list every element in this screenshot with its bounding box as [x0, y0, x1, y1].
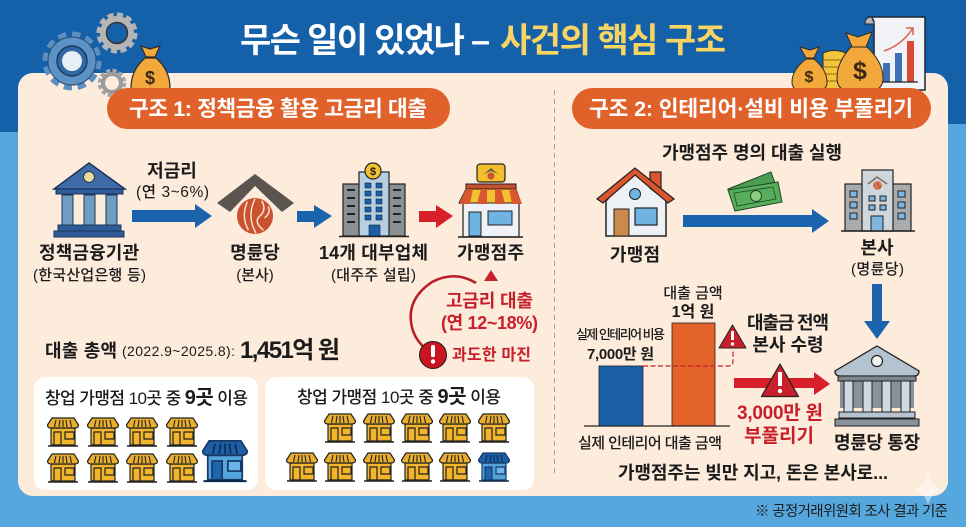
icon: large warning triangle [762, 364, 798, 396]
main panel [18, 73, 948, 496]
icon: HQ building [841, 170, 915, 231]
icon: cash [728, 172, 782, 211]
icon: small warning triangle [719, 325, 746, 348]
label: HQ bank account: 명륜당 통장 [834, 433, 920, 453]
high interest loan loop arrow [411, 270, 498, 348]
label: low interest [136, 161, 209, 201]
title: 사건의 핵심 구조 [500, 22, 726, 60]
label: policy finance institution [33, 243, 146, 284]
bar chart: interior cost vs loan amount: 1억 원 [672, 303, 714, 321]
icon: policy bank [54, 163, 125, 237]
label: high interest loan: 고금리 대출 [446, 291, 533, 311]
label: 30 million won inflated: 3,000만 원 [737, 402, 823, 424]
panel heading: structure 2: 구조 2: 인테리어·설비 비용 부풀리기 [589, 97, 913, 121]
icon: lender building [339, 163, 409, 236]
label: policy finance institution: (한국산업은행 등) [33, 267, 146, 284]
title: 무슨 일이 있었나 – [240, 22, 490, 60]
label: HQ Myungryundang [851, 238, 904, 278]
icon: money bags, coins and growth report: $ [805, 69, 814, 86]
conclusion text: 가맹점주는 빚만 지고, 돈은 본사로... [618, 463, 888, 483]
arrow: bank to HQ [132, 204, 212, 228]
label: 14 lenders: (대주주 설립) [331, 267, 416, 284]
label: loan under franchisee name: 가맹점주 명의 대출 실행 [662, 143, 842, 163]
label: full loan received by HQ: 본사 수령 [752, 335, 824, 355]
panel: franchise usage left [34, 377, 258, 490]
label: 14 lenders: 14개 대부업체 [319, 243, 428, 263]
icon: account bank [835, 346, 919, 426]
label: high interest loan [441, 291, 538, 333]
label: full loan received by HQ: 대출금 전액 [747, 313, 829, 333]
label: Myungryundang HQ: 명륜당 [230, 243, 280, 263]
label: franchisee: 가맹점주 [457, 243, 524, 263]
callout: excessive margin [420, 342, 531, 368]
arrow: store to HQ [683, 209, 829, 233]
total loan amount: 대출 총액 [45, 341, 117, 361]
bar chart: interior cost vs loan amount: 7,000만 원 [587, 346, 654, 363]
panel: franchise usage right [265, 377, 534, 490]
icon: money bags, coins and growth report: $ [853, 57, 867, 85]
label: Myungryundang HQ [230, 243, 280, 284]
title [240, 22, 726, 60]
decorative sparkle [911, 472, 945, 506]
label: HQ Myungryundang: (명륜당) [851, 261, 904, 278]
bar chart: interior cost vs loan amount: 실제 인테리어 비용 [576, 327, 665, 342]
label: Myungryundang HQ: (본사) [236, 267, 274, 284]
label: policy finance institution: 정책금융기관 [39, 243, 139, 263]
label: high interest loan: (연 12~18%) [441, 313, 538, 333]
panel: franchise usage left: 창업 가맹점 10곳 중 9곳 이용 [45, 387, 248, 409]
label: HQ Myungryundang: 본사 [860, 238, 894, 258]
bar chart: interior cost vs loan amount: 실제 인테리어 대출 금액 [578, 435, 722, 452]
icon: lender building: $ [370, 166, 376, 178]
label: 30 million won inflated [737, 402, 823, 447]
panel heading: structure 1: 구조 1: 정책금융 활용 고금리 대출 [129, 97, 427, 121]
panel heading: structure 1 [107, 88, 450, 129]
bar chart: interior cost vs loan amount: 대출 금액 [663, 285, 723, 302]
panel: franchise usage right: 창업 가맹점 10곳 중 9곳 이용 [297, 386, 501, 408]
arrow: inflated amount to account [734, 372, 830, 395]
label: 30 million won inflated: 부풀리기 [744, 425, 814, 447]
icon: money bags, coins and growth report [792, 17, 925, 90]
label: full loan received by HQ [747, 313, 829, 355]
label: low interest: (연 3~6%) [136, 183, 209, 201]
bar chart: interior cost vs loan amount [576, 285, 733, 452]
icon: house [597, 168, 674, 236]
panel heading: structure 2 [572, 88, 931, 129]
icon: gears and money bag [46, 15, 170, 98]
arrow: HQ to lenders [297, 205, 332, 228]
total loan amount: (2022.9~2025.8): [122, 343, 235, 359]
arrow: HQ down to account [864, 284, 890, 339]
total loan amount [45, 337, 340, 364]
icon: gears and money bag: $ [145, 68, 155, 88]
callout: excessive margin: 과도한 마진 [452, 346, 531, 364]
label: franchise store: 가맹점 [610, 245, 660, 265]
arrow: lenders to franchisee [419, 205, 453, 228]
label: low interest: 저금리 [147, 161, 197, 181]
icon: franchise store [458, 164, 523, 237]
icon: Myungryundang logo [217, 174, 294, 234]
total loan amount: 1,451억 원 [240, 337, 340, 364]
label: 14 lenders [319, 243, 428, 284]
footnote: ※ 공정거래위원회 조사 결과 기준 [755, 503, 948, 520]
